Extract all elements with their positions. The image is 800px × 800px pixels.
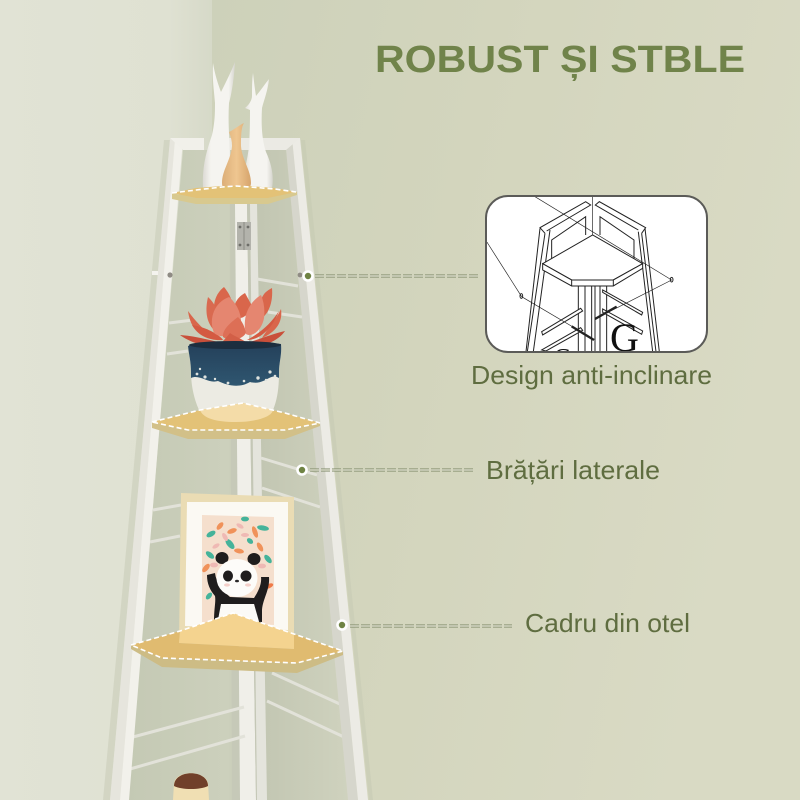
diagram: anti-tilt design bbox=[485, 195, 708, 353]
icon: blue and white pot bbox=[188, 341, 281, 416]
hinge bbox=[237, 222, 251, 250]
icon: wooden figurine bbox=[173, 773, 209, 800]
top bars of frame bbox=[170, 138, 300, 150]
shelf: middle bbox=[152, 403, 320, 439]
icon: orange vase bbox=[222, 123, 251, 193]
marker: anti-tilt point with leader bbox=[304, 272, 478, 280]
label: side brackets: Brățări laterale bbox=[486, 455, 660, 485]
marker: side brackets with leader bbox=[298, 466, 473, 474]
panda bbox=[207, 552, 269, 625]
marker: steel frame with leader bbox=[338, 620, 512, 630]
picture frame with panda art bbox=[179, 493, 294, 649]
left frame leg bbox=[110, 139, 183, 800]
right frame leg bbox=[285, 138, 368, 800]
icon: succulent plant bbox=[180, 287, 285, 346]
yellow highlight over frame base bbox=[179, 613, 294, 649]
technical line drawing bbox=[487, 185, 673, 352]
centre post bbox=[230, 200, 267, 800]
back panel shadow between frame legs bbox=[128, 150, 348, 800]
packaging letters in diagram: G bbox=[610, 315, 639, 360]
falling leaves bbox=[201, 517, 274, 601]
panda illustration bbox=[200, 513, 276, 627]
label: anti-tilt design: Design anti-inclinare bbox=[471, 360, 712, 390]
shelf: bottom bbox=[131, 613, 343, 673]
icon: white deer vases bbox=[203, 62, 273, 188]
panel: corner shelf unit bbox=[110, 62, 368, 800]
label: steel frame: Cadru din otel bbox=[525, 608, 690, 638]
packaging letters in diagram: G bbox=[554, 345, 571, 371]
title: ROBUST ȘI STBLE bbox=[375, 39, 745, 81]
packaging letters in diagram bbox=[557, 324, 638, 351]
frame screws bbox=[152, 271, 302, 278]
shelf: top bbox=[172, 186, 297, 204]
frame rails bbox=[130, 279, 344, 769]
